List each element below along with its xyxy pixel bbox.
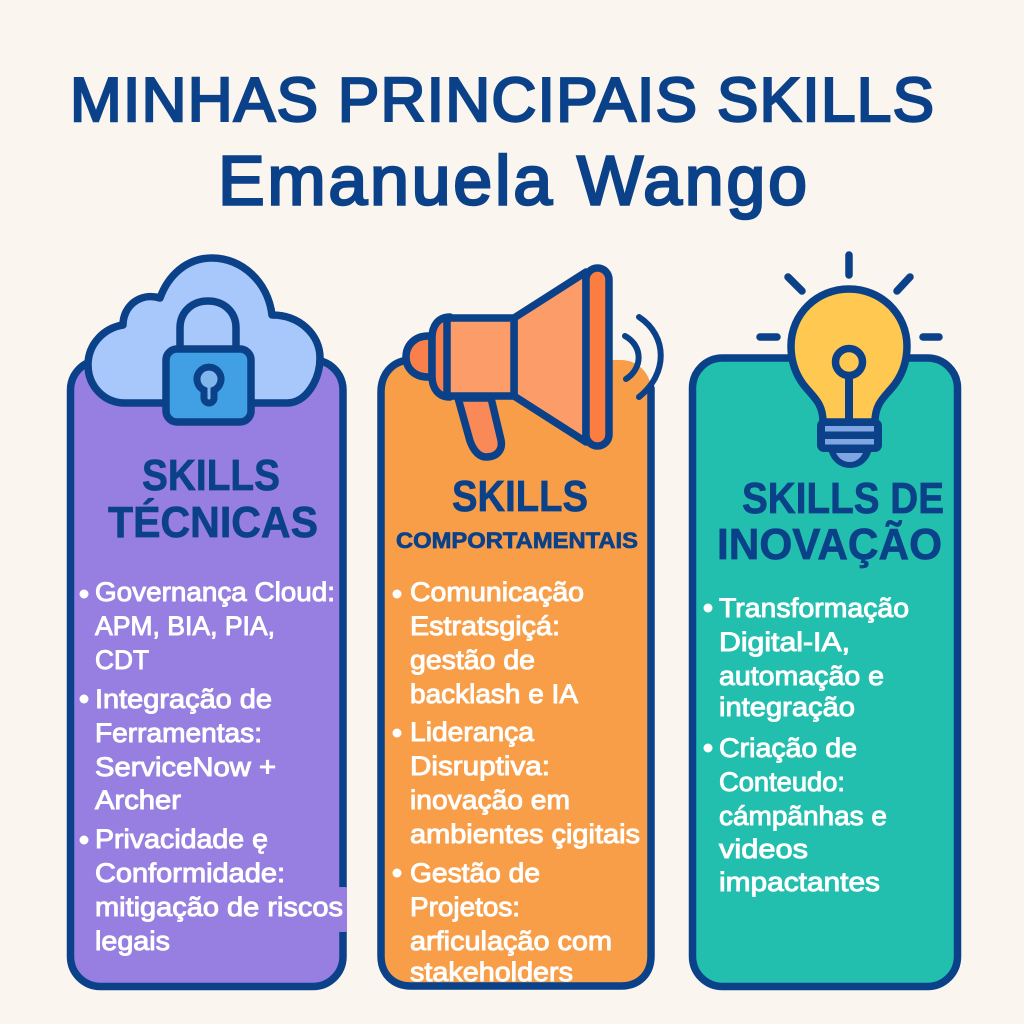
list: skills comportamentais: arficulação com bbox=[410, 926, 612, 956]
list: skills comportamentais: Projetos: bbox=[410, 892, 520, 922]
list: skills técnicas: Conformidade: bbox=[95, 858, 285, 888]
list: skills técnicas: Ferramentas: bbox=[95, 718, 262, 748]
icon: megaphone bbox=[406, 268, 661, 457]
list: skills técnicas: mitigação de riscos bbox=[95, 892, 343, 922]
list: skills técnicas: Integração de bbox=[95, 684, 272, 714]
heading: skills técnicas: SKILLS bbox=[142, 451, 280, 500]
heading: skills de inovação: INOVAÇÃO bbox=[717, 519, 942, 569]
list: skills comportamentais: inovação em bbox=[410, 785, 570, 815]
title: Emanuela Wango bbox=[218, 142, 807, 220]
list: skills técnicas: APM, BIA, PIA, bbox=[95, 611, 275, 641]
list: skills de inovação: Transformação bbox=[719, 593, 909, 623]
list: skills de inovação: Criação de bbox=[719, 733, 857, 763]
list: skills comportamentais: Estratsgiçá: bbox=[410, 611, 560, 641]
list: skills comportamentais: Liderança bbox=[410, 717, 534, 747]
list: skills técnicas: legais bbox=[95, 926, 170, 956]
list: skills de inovação: Digital-IA, bbox=[719, 627, 850, 657]
heading: skills técnicas: TÉCNICAS bbox=[108, 497, 318, 547]
list: skills técnicas: Privacidade ę bbox=[95, 824, 268, 854]
panel: skills de inovação bbox=[692, 255, 958, 986]
list: skills técnicas bbox=[80, 577, 343, 956]
title: MINHAS PRINCIPAIS SKILLS bbox=[70, 66, 934, 135]
list: skills de inovação: integração bbox=[719, 692, 855, 722]
panel: skills comportamentais bbox=[381, 268, 661, 987]
heading: skills de inovação: SKILLS DE bbox=[742, 474, 944, 523]
list: skills técnicas: Archer bbox=[95, 785, 181, 815]
icon: cloud with padlock bbox=[88, 258, 320, 422]
list: skills comportamentais: Gestão de bbox=[410, 858, 540, 888]
list: skills técnicas: ServiceNow + bbox=[95, 752, 276, 782]
list: skills comportamentais: Disruptiva: bbox=[410, 751, 550, 781]
icon: light bulb bbox=[760, 255, 939, 468]
list: skills comportamentais: ambientes çigitais bbox=[410, 819, 640, 849]
heading: skills técnicas bbox=[108, 451, 318, 547]
heading: skills comportamentais: COMPORTAMENTAIS bbox=[396, 528, 638, 553]
list: skills comportamentais: stakeholders bbox=[410, 957, 573, 987]
title bbox=[70, 66, 934, 220]
heading: skills comportamentais: SKILLS bbox=[452, 472, 588, 521]
list: skills técnicas: CDT bbox=[95, 645, 149, 675]
heading: skills de inovação bbox=[717, 474, 944, 569]
list: skills comportamentais: gestão de bbox=[410, 645, 535, 675]
list: skills comportamentais bbox=[392, 577, 640, 987]
list: skills comportamentais: backlash e IA bbox=[410, 679, 578, 709]
heading: skills comportamentais bbox=[396, 472, 638, 553]
panel: skills técnicas bbox=[70, 258, 347, 986]
list: skills técnicas: Governança Cloud: bbox=[95, 577, 335, 607]
list: skills de inovação: videos bbox=[719, 834, 808, 864]
list: skills de inovação: impactantes bbox=[719, 867, 880, 897]
list: skills de inovação: cámpãnhas e bbox=[719, 801, 887, 831]
list: skills de inovação: automação e bbox=[719, 661, 884, 691]
list: skills de inovação bbox=[704, 593, 909, 897]
list: skills comportamentais: Comunicação bbox=[410, 577, 584, 607]
list: skills de inovação: Conteudo: bbox=[719, 767, 845, 797]
